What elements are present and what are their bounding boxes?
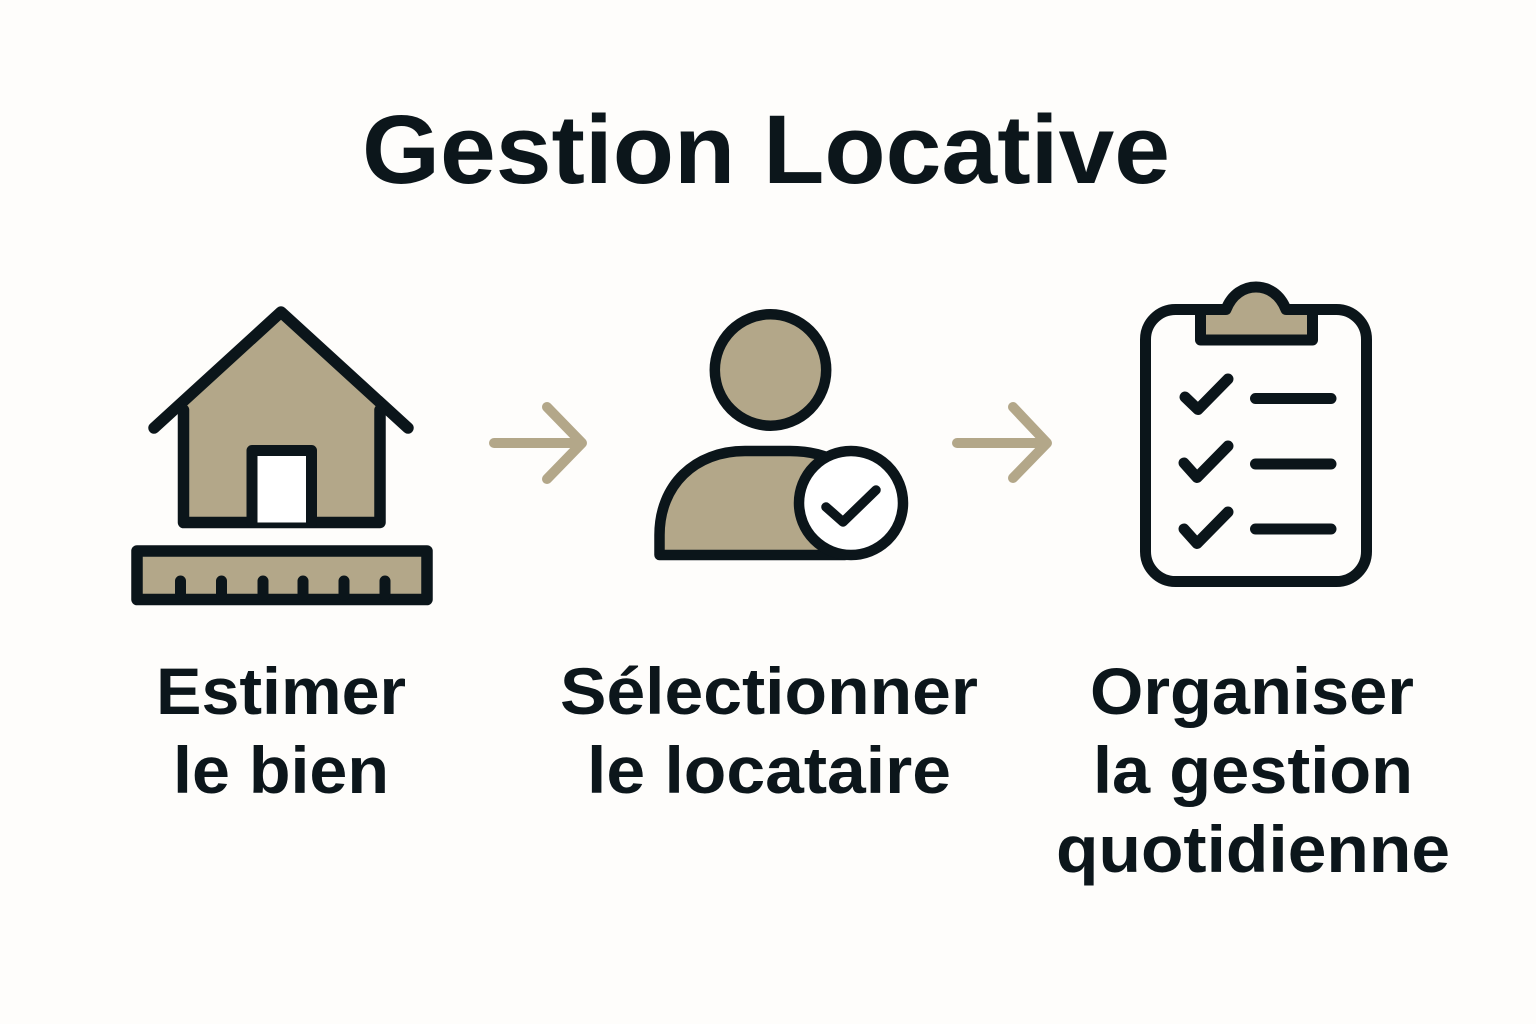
title: Gestion Locative xyxy=(362,95,1170,204)
label: step 3: Organiser xyxy=(1090,654,1414,728)
label: step 1 xyxy=(156,654,406,807)
icon: clipboard checklist xyxy=(1146,287,1366,582)
label: step 3: quotidienne xyxy=(1056,812,1450,886)
label: step 2 xyxy=(560,654,978,807)
label: step 1: Estimer xyxy=(156,654,406,728)
icon: house on ruler xyxy=(137,312,427,600)
label: step 2: le locataire xyxy=(587,733,951,807)
label: step 3 xyxy=(1056,654,1450,886)
label: step 2: Sélectionner xyxy=(560,654,978,728)
icon: person with check badge xyxy=(660,314,903,555)
arrow: step 1 to step 2 xyxy=(494,407,582,479)
label: step 3: la gestion xyxy=(1093,733,1413,807)
label: step 1: le bien xyxy=(173,733,389,807)
arrow: step 2 to step 3 xyxy=(957,407,1047,478)
